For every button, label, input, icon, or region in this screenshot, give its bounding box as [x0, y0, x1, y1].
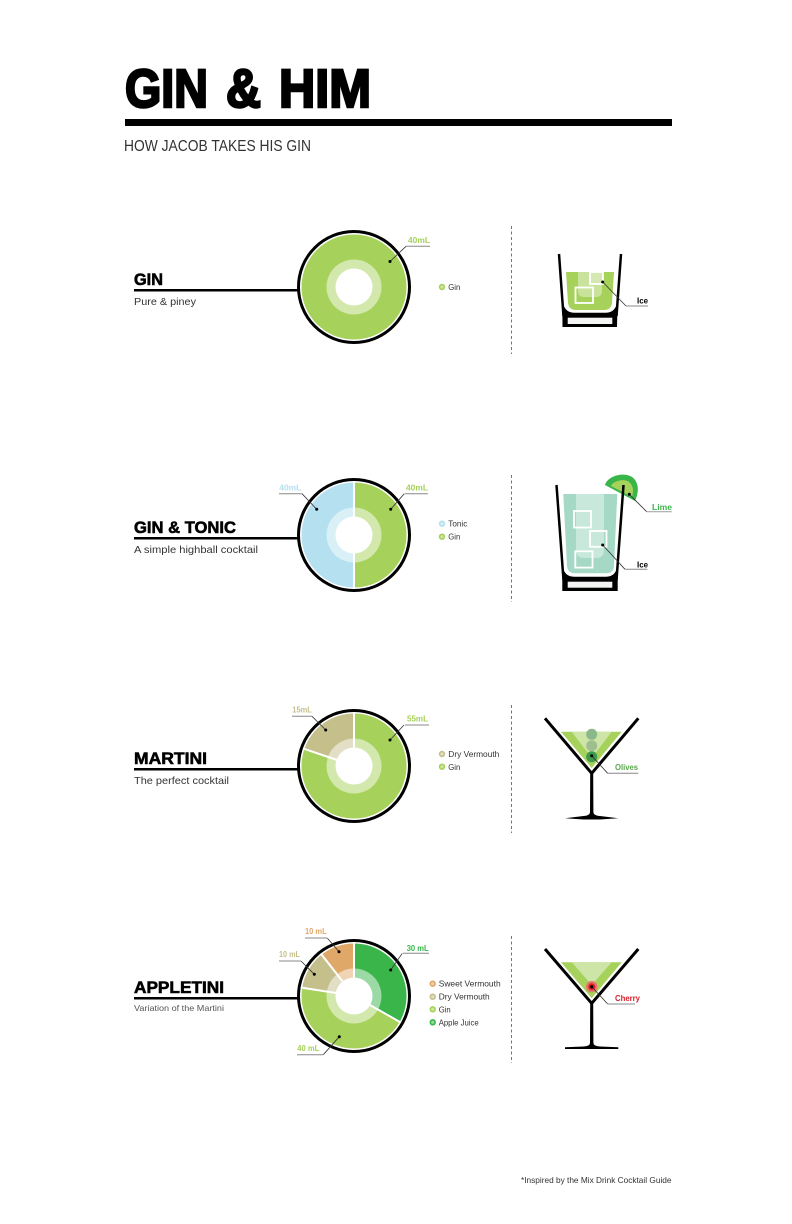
donut chart: gin: 40mL [408, 235, 430, 245]
title: GIN [125, 59, 208, 119]
subtitle: HOW JACOB TAKES HIS GIN [124, 138, 311, 155]
heading: gin and tonic: A simple highball cocktail [134, 544, 258, 556]
icon: olives [586, 729, 597, 762]
footnote: *Inspired by the Mix Drink Cocktail Guide [521, 1175, 672, 1185]
panel: gin and tonic [134, 475, 672, 591]
title: & [226, 59, 261, 119]
heading: martini [134, 749, 299, 787]
donut chart: martini [292, 704, 429, 822]
drink glass: appletini with cherry: Cherry [615, 993, 640, 1003]
panel: gin [134, 232, 648, 342]
legend: gin [440, 282, 461, 292]
heading: gin and tonic: GIN & TONIC [134, 518, 236, 537]
title rule [125, 119, 672, 126]
legend: gin and tonic: Tonic [448, 519, 468, 529]
drink glass: gin on ice [559, 254, 648, 327]
donut chart: gin and tonic [279, 480, 428, 590]
heading: gin: Pure & piney [134, 296, 197, 308]
donut chart: gin [298, 232, 430, 342]
legend: gin and tonic [440, 519, 468, 542]
legend: appletini: Apple Juice [439, 1017, 479, 1027]
legend: appletini [430, 979, 501, 1027]
title [125, 59, 371, 119]
heading: gin [134, 270, 299, 308]
heading: gin and tonic [134, 518, 299, 556]
legend: martini: Dry Vermouth [448, 749, 500, 759]
legend: appletini: Sweet Vermouth [439, 979, 501, 989]
drink glass: highball with lime: Ice [637, 560, 648, 570]
legend: appletini: Dry Vermouth [439, 992, 490, 1002]
drink glass: gin on ice: Ice [637, 296, 648, 306]
heading: martini: The perfect cocktail [134, 775, 229, 787]
icon: lime wedge [605, 475, 638, 501]
donut chart: appletini: 10 mL [279, 949, 300, 959]
donut chart: martini: 15mL [292, 704, 312, 714]
donut chart: appletini: 10 mL [305, 926, 327, 936]
donut chart: gin and tonic: 40mL [406, 482, 428, 492]
drink glass: martini with olives [545, 718, 638, 820]
icon: cherry [586, 981, 597, 992]
panel: martini [134, 704, 638, 822]
drink glass: highball with lime [556, 475, 672, 591]
legend: gin: Gin [448, 282, 461, 292]
heading: appletini: Variation of the Martini [134, 1003, 224, 1013]
panel: appletini [134, 926, 640, 1055]
drink glass: highball with lime: Lime [652, 502, 672, 512]
heading: martini: MARTINI [134, 749, 207, 768]
heading: appletini: APPLETINI [134, 978, 224, 997]
donut chart: appletini [279, 926, 429, 1055]
heading: gin: GIN [134, 270, 163, 289]
legend: appletini: Gin [439, 1004, 451, 1014]
legend: gin and tonic: Gin [448, 532, 461, 542]
title: HIM [279, 59, 371, 119]
donut chart: martini: 55mL [407, 714, 428, 724]
legend: martini [440, 749, 500, 772]
donut chart: appletini: 40 mL [297, 1043, 319, 1053]
donut chart: appletini: 30 mL [407, 943, 429, 953]
heading: appletini [134, 978, 299, 1013]
drink glass: martini with olives: Olives [615, 762, 638, 772]
drink glass: appletini with cherry [545, 949, 640, 1049]
donut chart: gin and tonic: 40mL [279, 482, 301, 492]
legend: martini: Gin [448, 762, 461, 772]
